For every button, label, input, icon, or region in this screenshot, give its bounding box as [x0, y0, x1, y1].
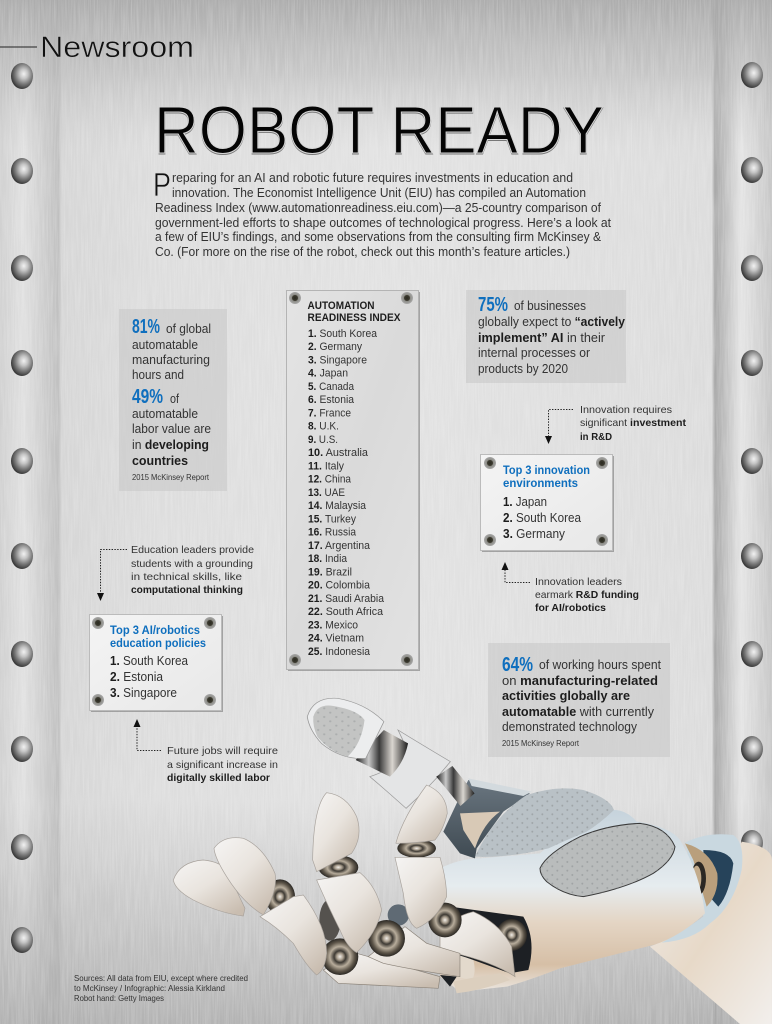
callout: 64% of working hours: 64%	[502, 654, 533, 676]
index ranking list: 25. Indonesia	[308, 646, 371, 658]
index ranking list: 9. U.S.	[308, 434, 338, 446]
callout: 81% / 49% statistics: 49%	[132, 386, 163, 408]
arrow: digital labor up to education panel	[134, 719, 161, 750]
index ranking list: 6. Estonia	[308, 394, 355, 406]
intro paragraph: innovation. The Economist Intelligence Unit (EIU) has compiled an Automation	[172, 186, 586, 200]
pinky finger	[173, 860, 245, 916]
note: education leaders: Education leaders provide	[131, 544, 254, 556]
note: education leaders: students with a grounding	[131, 558, 253, 570]
panel: top 3 AI/robotics education policies	[90, 614, 223, 712]
innovation list	[503, 495, 581, 541]
callout: 64% of working hours: of working hours spent	[539, 658, 662, 672]
index finger	[307, 698, 475, 808]
rivets: left column	[11, 63, 33, 953]
callout: 81% / 49% statistics: in developing	[132, 438, 209, 452]
intro paragraph: government-led efforts to shape outcomes of technological progress. Here’s a look at	[155, 216, 611, 230]
index ranking list: 1. South Korea	[308, 328, 378, 340]
credits	[74, 973, 248, 1003]
intro paragraph	[153, 166, 611, 259]
callout: 81% / 49% statistics: countries	[132, 454, 188, 468]
note: R&D funding: Innovation leaders	[535, 576, 622, 588]
note: R&D funding	[535, 576, 639, 614]
index ranking list: 2. Germany	[308, 341, 362, 353]
note: digitally skilled labor	[167, 745, 278, 784]
note: investment in R&D: Innovation requires	[580, 404, 672, 416]
intro paragraph: Co. (For more on the rise of the robot, check out this month’s feature articles.)	[155, 245, 570, 259]
callout: 81% / 49% statistics: manufacturing	[132, 353, 210, 367]
back knuckle bearings	[319, 899, 462, 941]
title: ROBOT READY: ROBOT READY	[154, 93, 604, 168]
note: digitally skilled labor: a significant increase in	[167, 759, 278, 771]
credits: Robot hand: Getty Images	[74, 993, 164, 1003]
index ranking list: 24. Vietnam	[308, 633, 364, 645]
callout: 75% of businesses: globally expect to “actively	[478, 315, 625, 329]
education list: 2. Estonia	[110, 670, 163, 684]
little finger	[214, 838, 327, 975]
callout: 75% of businesses: 75%	[478, 294, 508, 316]
index ranking list: 12. China	[308, 474, 352, 486]
index ranking list: 15. Turkey	[308, 514, 356, 526]
index ranking list: 18. India	[308, 553, 348, 565]
callout: 81% / 49% statistics	[119, 309, 227, 491]
index ranking list: 4. Japan	[308, 368, 348, 380]
index ranking list: 7. France	[308, 408, 351, 420]
callout: 81% / 49% statistics: of global	[166, 322, 211, 336]
education heading	[110, 623, 206, 650]
index ranking list: 17. Argentina	[308, 540, 371, 552]
panel: top 3 innovation environments	[480, 454, 614, 552]
innovation list: 1. Japan	[503, 495, 547, 509]
arrow: investment to innovation panel	[545, 410, 573, 444]
arrow: computational thinking to education panel	[97, 550, 127, 601]
innovation heading	[503, 463, 590, 490]
index heading	[308, 300, 401, 324]
index ranking list: 8. U.K.	[308, 421, 339, 433]
education list: 3. Singapore	[110, 686, 177, 700]
callout: 75% of businesses	[466, 290, 626, 383]
note: digitally skilled labor: digitally skilled labor	[167, 772, 270, 784]
section header: Newsroom: Newsroom	[40, 31, 194, 64]
callout: 75% of businesses: implement” AI in their	[478, 331, 605, 345]
note: education leaders: in technical skills, like	[131, 571, 242, 583]
callout: 81% / 49% statistics: 81%	[132, 316, 160, 338]
callout: 81% / 49% statistics: automatable	[132, 338, 198, 352]
education list: 1. South Korea	[110, 654, 188, 668]
index ranking list: 11. Italy	[308, 460, 344, 472]
index ranking list: 23. Mexico	[308, 620, 358, 632]
robot hand illustration	[173, 698, 772, 1024]
fingers	[173, 785, 462, 988]
note: digitally skilled labor: Future jobs will require	[167, 745, 278, 757]
panel: Automation Readiness Index	[286, 290, 420, 671]
middle finger	[313, 793, 382, 953]
lower finger segments	[322, 920, 460, 988]
callout: 64% of working hours: 2015 McKinsey Report	[502, 738, 580, 748]
index ranking list: 3. Singapore	[308, 354, 367, 366]
note: investment in R&D	[580, 404, 687, 443]
ring finger	[395, 785, 447, 928]
index ranking list: 20. Colombia	[308, 580, 371, 592]
index ranking list: 19. Brazil	[308, 566, 352, 578]
credits: to McKinsey / Infographic: Alessia Kirkland	[74, 983, 225, 993]
index ranking list: 5. Canada	[308, 381, 355, 393]
education list	[110, 654, 188, 700]
callout: 81% / 49% statistics: hours and	[132, 368, 184, 382]
callout: 81% / 49% statistics: of	[170, 392, 179, 406]
note: education leaders	[131, 544, 254, 596]
callout: 64% of working hours	[488, 643, 670, 757]
callout: 64% of working hours: activities globally are	[502, 689, 630, 703]
note: education leaders: computational thinking	[131, 584, 243, 596]
index ranking list: 16. Russia	[308, 527, 357, 539]
callout: 64% of working hours: demonstrated technology	[502, 720, 638, 734]
callout: 75% of businesses: products by 2020	[478, 362, 568, 376]
index ranking list: 21. Saudi Arabia	[308, 593, 385, 605]
intro paragraph: Readiness Index (www.automationreadiness.eiu.com)—a 25-country comparison of	[155, 201, 602, 215]
arrow: R&D funding up to innovation panel	[502, 562, 530, 582]
note: R&D funding: for AI/robotics	[535, 602, 606, 614]
callout: 81% / 49% statistics: 2015 McKinsey Report	[132, 472, 210, 482]
innovation heading: Top 3 innovation	[503, 463, 590, 477]
intro paragraph: P	[153, 166, 171, 203]
intro paragraph: reparing for an AI and robotic future requires investments in education and	[172, 171, 573, 185]
callout: 75% of businesses: internal processes or	[478, 346, 590, 360]
callout: 64% of working hours: automatable with currently	[502, 705, 655, 719]
innovation heading: environments	[503, 476, 578, 490]
note: investment in R&D: significant investment	[580, 417, 687, 429]
innovation list: 3. Germany	[503, 527, 566, 541]
index ranking list: 13. UAE	[308, 487, 345, 499]
callout: 75% of businesses: of businesses	[514, 299, 586, 313]
palm, wrist and forearm	[440, 778, 772, 1024]
education heading: Top 3 AI/robotics	[110, 623, 200, 637]
intro paragraph: a few of EIU’s findings, and some observations from the consulting firm McKinsey &	[155, 230, 602, 244]
innovation list: 2. South Korea	[503, 511, 581, 525]
index ranking list: 14. Malaysia	[308, 500, 367, 512]
callout: 81% / 49% statistics: labor value are	[132, 422, 211, 436]
index ranking list	[308, 328, 385, 658]
index heading: READINESS INDEX	[308, 312, 401, 324]
education heading: education policies	[110, 636, 206, 650]
note: R&D funding: earmark R&D funding	[535, 589, 639, 601]
callout: 64% of working hours: on manufacturing-related	[502, 674, 658, 688]
rivets: right column	[741, 62, 763, 856]
index ranking list: 10. Australia	[308, 447, 369, 459]
index ranking list: 22. South Africa	[308, 606, 384, 618]
credits: Sources: All data from EIU, except where credited	[74, 973, 248, 983]
note: investment in R&D: in R&D	[580, 431, 612, 443]
index heading: AUTOMATION	[308, 300, 375, 312]
callout: 81% / 49% statistics: automatable	[132, 407, 198, 421]
